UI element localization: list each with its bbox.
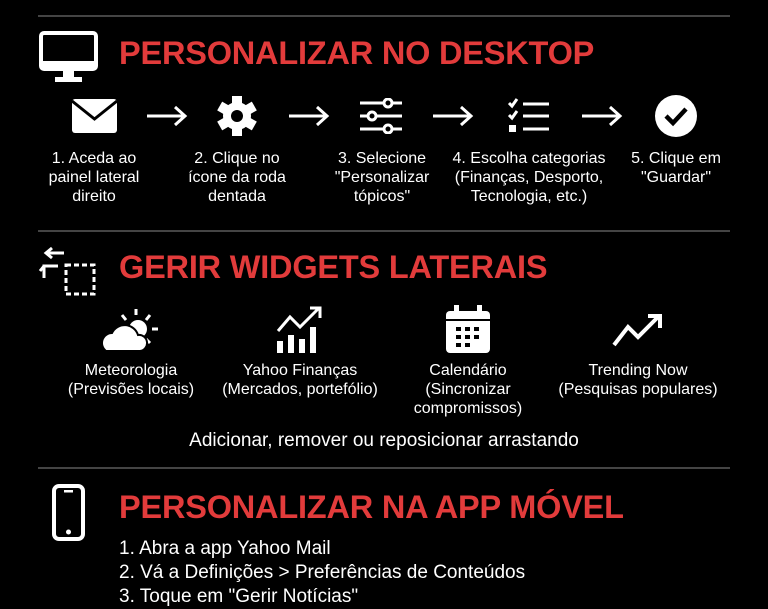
steps row: 2. Clique no [194,150,280,167]
steps row: (Finanças, Desporto, [455,169,603,186]
steps row: ícone da roda [188,169,286,186]
widgets note: Adicionar, remover ou reposicionar arrastando [189,430,579,451]
icon: phone [52,484,85,541]
step labels: direito [72,188,116,205]
icon: trending [612,314,662,346]
step labels: painel lateral [49,169,139,186]
icon: sliders [360,98,402,134]
steps row: tópicos" [354,188,410,205]
steps row: "Guardar" [641,169,711,186]
steps row: 5. Clique em [631,150,721,167]
step labels [49,150,139,205]
arrow [289,106,330,126]
icon: finance chart [277,306,322,353]
widgets row: (Pesquisas populares) [558,381,718,398]
icon: weather [103,309,158,350]
steps row: "Personalizar [335,169,429,186]
icon: calendar [446,305,490,353]
arrow [582,106,622,126]
widgets row: (Mercados, portefólio) [222,381,378,398]
icon: widgets move [38,246,96,296]
icon: gear [217,96,257,136]
widgets row: Yahoo Finanças [243,362,357,379]
widget labels [68,362,194,398]
arrow [147,106,188,126]
widget labels: Meteorologia [85,362,177,379]
heading: desktop: PERSONALIZAR NO DESKTOP [119,35,594,71]
widget labels: (Previsões locais) [68,381,194,398]
icon: check circle [655,95,697,137]
heading: mobile: PERSONALIZAR NA APP MÓVEL [119,489,624,525]
widgets row [68,305,718,417]
widgets row: (Sincronizar [425,381,511,398]
steps row: 3. Selecione [338,150,426,167]
icon: monitor [39,31,98,82]
icon: checklist [508,98,549,132]
steps row: 4. Escolha categorias [452,150,605,167]
mobile steps list: 3. Toque em "Gerir Notícias" [119,586,358,607]
steps row [49,95,721,205]
icon: envelope [72,99,117,133]
mobile steps list [119,538,525,607]
widgets row: compromissos) [414,400,522,417]
step labels: 1. Aceda ao [52,150,136,167]
heading: widgets: GERIR WIDGETS LATERAIS [119,249,547,285]
steps row: Tecnologia, etc.) [471,188,587,205]
steps row: dentada [208,188,266,205]
widgets row: Trending Now [588,362,688,379]
mobile steps list: 1. Abra a app Yahoo Mail [119,538,331,559]
widgets row: Calendário [429,362,507,379]
arrow [433,106,474,126]
mobile steps list: 2. Vá a Definições > Preferências de Conteúdos [119,562,525,583]
